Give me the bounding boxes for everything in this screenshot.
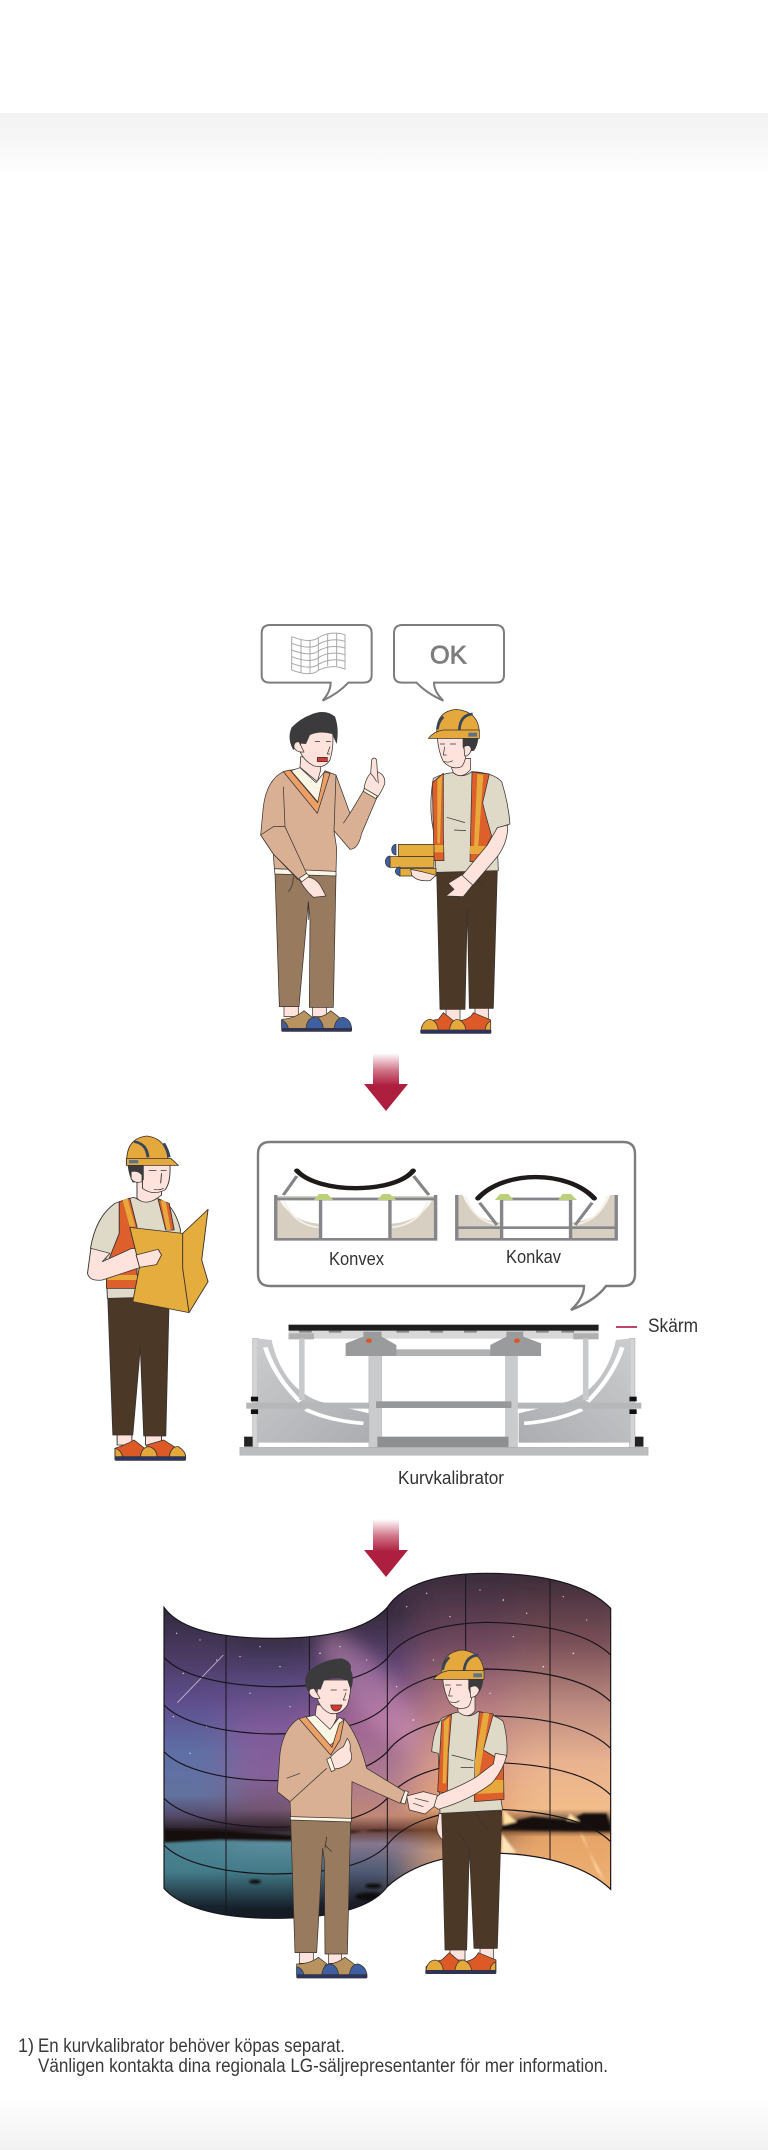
footnote: [18, 2036, 608, 2077]
bottom gradient band: [0, 2098, 768, 2150]
step 1: consultation scene: [261, 625, 510, 1033]
footnote marker: 1): [18, 2036, 34, 2057]
right side plate: [518, 1338, 643, 1450]
product: curve calibrator: [240, 1325, 648, 1455]
horizon: [164, 1810, 611, 1901]
speech bubble with OK: OK: [430, 641, 467, 669]
diagram: convex: [276, 1171, 436, 1239]
footnote line 1: En kurvkalibrator behöver köpas separat.: [38, 2036, 345, 2057]
stars: [173, 1589, 587, 1754]
callout bubble: curve modes: [258, 1142, 635, 1310]
footnote line 2: Vänligen kontakta dina regionala LG-säljrepresentanter för mer information.: [38, 2056, 608, 2077]
figure: man in sweater pointing up: [261, 712, 385, 1031]
curved LED screen: [163, 1572, 612, 1919]
speech bubble with curved grid icon: [262, 625, 372, 701]
label: Skärm with pointer: [616, 1316, 698, 1337]
label: Konvex: Konvex: [329, 1249, 384, 1269]
label: Kurvkalibrator: Kurvkalibrator: [398, 1468, 504, 1488]
label: Skärm with pointer: Skärm: [648, 1316, 698, 1337]
milky way: [311, 1630, 422, 1748]
horizontal grid lines: [164, 1572, 611, 1920]
centre frame: [240, 1332, 648, 1455]
step 3: curved video wall with figures: [163, 1572, 612, 1978]
figure: worker with pipes: [385, 709, 510, 1033]
arrow 2: [364, 1519, 408, 1577]
top gradient band: [0, 113, 768, 175]
step 2: worker reading plan: [87, 1136, 208, 1460]
screen bar: [289, 1325, 599, 1339]
figure: worker shaking hands: [407, 1650, 507, 1974]
left side plate: [244, 1338, 370, 1450]
arrow 1: [364, 1053, 408, 1111]
shooting star: [177, 1655, 223, 1703]
label: Konkav: Konkav: [506, 1247, 561, 1267]
figure: smiling man in sweater shaking hands: [277, 1658, 408, 1978]
icon: curved grid: [292, 633, 345, 674]
speech bubble with OK: [394, 625, 504, 701]
diagram: concave: [457, 1177, 616, 1239]
